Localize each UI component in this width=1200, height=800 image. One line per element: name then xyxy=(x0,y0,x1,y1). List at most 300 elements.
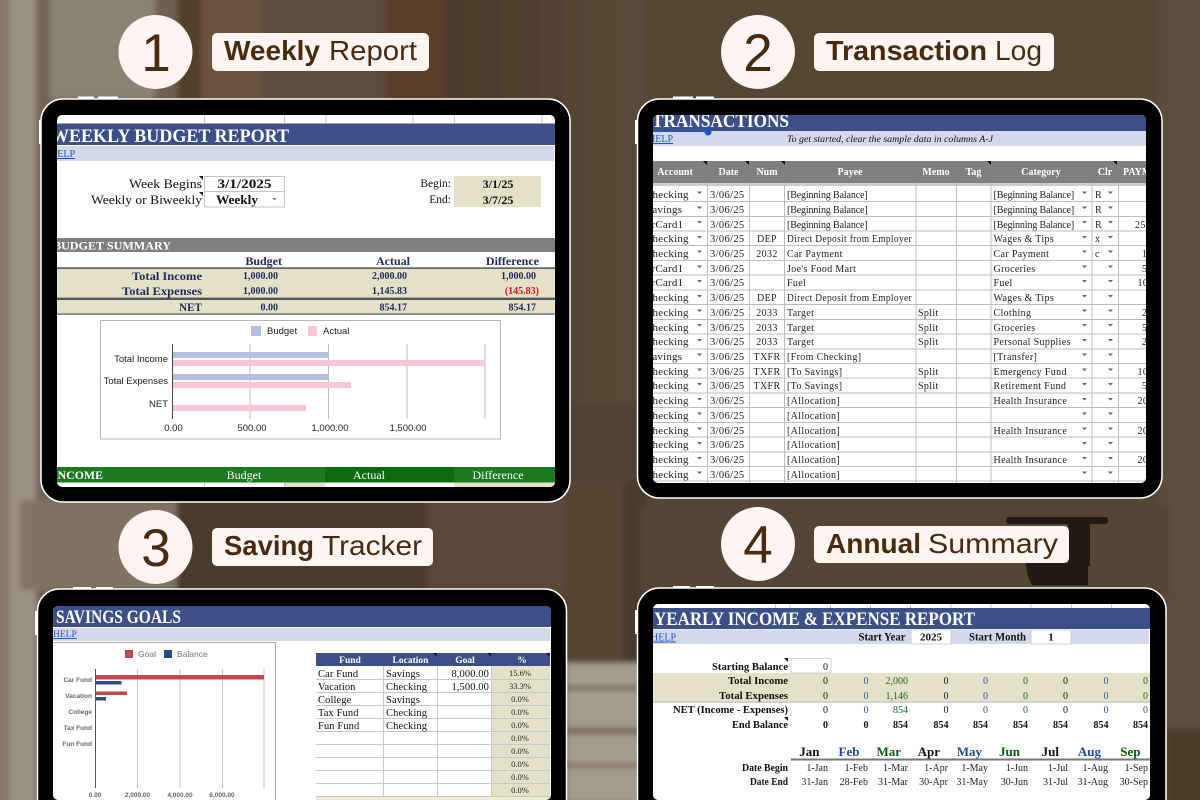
number column: 2033 xyxy=(756,337,778,348)
savings funds table: 0.0% xyxy=(511,785,529,795)
yearly summary table: 854 xyxy=(1053,720,1068,731)
memo column: Split xyxy=(918,381,939,392)
payment column xyxy=(1135,221,1146,463)
income section band: Actual xyxy=(353,468,386,482)
yearly summary table: 0 xyxy=(864,691,868,702)
yearly summary table: 0 xyxy=(1143,705,1148,716)
label: Weekly Report: Report xyxy=(329,35,417,66)
savings funds table: Fun Fund xyxy=(318,721,360,732)
yearly summary table: 0 xyxy=(1104,676,1108,687)
savings funds table: % xyxy=(517,656,527,666)
category column: Retirement Fund xyxy=(994,381,1066,392)
account column: CrCard1 xyxy=(644,263,683,275)
month headers and date ranges: Sep xyxy=(1120,744,1140,759)
month headers and date ranges: 1-Mar xyxy=(883,763,909,774)
payee column: [Allocation] xyxy=(787,440,840,451)
savings title bar xyxy=(53,606,551,628)
cleared column: R xyxy=(1095,220,1102,231)
savings funds table: 0.0% xyxy=(511,733,529,743)
chart axis labels xyxy=(62,677,235,799)
yearly summary table xyxy=(653,658,1150,731)
savings funds table: Checking xyxy=(386,708,428,719)
memo column: Split xyxy=(918,337,939,348)
savings funds table: 0.0% xyxy=(511,694,529,704)
payee column: [From Checking] xyxy=(787,352,861,363)
begin and end dates: End: xyxy=(429,194,451,206)
yearly summary table: 854 xyxy=(934,720,948,731)
cleared column: R xyxy=(1095,190,1102,201)
payee column: [Allocation] xyxy=(787,426,840,437)
number badge 4: 4 xyxy=(743,516,773,575)
heading 3: Saving Tracker xyxy=(118,510,433,584)
help band with instructions: HELP xyxy=(648,134,673,145)
month headers and date ranges: Mar xyxy=(876,744,901,759)
payment column: 100.00 xyxy=(1138,367,1167,378)
yearly summary table: 0 xyxy=(1063,691,1068,702)
budget summary table: NET xyxy=(179,300,202,314)
settings band xyxy=(651,630,1149,644)
settings band: Start Year xyxy=(858,632,906,644)
category column: Health Insurance xyxy=(994,455,1067,466)
heading 2: Transaction Log xyxy=(721,15,1054,89)
report title bar xyxy=(51,124,555,147)
date column: 3/06/25 xyxy=(710,426,745,437)
income section band xyxy=(53,467,555,488)
cell selection handle xyxy=(653,128,712,136)
savings title bar: SAVINGS GOALS xyxy=(56,608,181,628)
account column: Savings xyxy=(646,204,682,216)
budget vs actual bar chart xyxy=(100,320,500,439)
account column: Checking xyxy=(645,425,689,437)
date column: 3/06/25 xyxy=(710,323,745,334)
month headers and date ranges: Apr xyxy=(918,744,940,759)
savings funds table: Savings xyxy=(386,695,420,706)
budget summary table xyxy=(57,254,555,315)
account column: CrCard1 xyxy=(644,277,683,289)
date column: 3/06/25 xyxy=(710,440,745,451)
yearly summary table: 0 xyxy=(1063,705,1068,716)
date inputs: 3/1/2025 xyxy=(218,176,272,191)
yearly summary table: 0 xyxy=(823,662,828,673)
month headers and date ranges: 1-Jan xyxy=(806,763,828,774)
number badge 3: 3 xyxy=(141,519,171,578)
help band xyxy=(50,146,554,161)
yearly summary table: Total Income xyxy=(728,676,788,687)
account column: Checking xyxy=(645,380,689,392)
memo column: Split xyxy=(918,323,939,334)
savings funds table: Checking xyxy=(386,721,428,732)
column headers xyxy=(653,161,1172,186)
savings funds table: 8,000.00 xyxy=(451,669,489,680)
chart axis labels: Car Fund xyxy=(63,677,92,684)
yearly summary table: End Balance xyxy=(732,720,788,731)
category column: Groceries xyxy=(994,264,1036,275)
month headers and date ranges: Feb xyxy=(839,744,860,759)
chart axis labels: 1,500.00 xyxy=(390,423,426,434)
budget summary table: (145.83) xyxy=(505,286,539,297)
yearly summary table: 854 xyxy=(893,720,908,731)
budget summary table: Budget xyxy=(245,254,282,268)
payee column: Target xyxy=(787,323,814,334)
budget summary table: 1,000.00 xyxy=(243,286,278,297)
payee column: [Allocation] xyxy=(787,470,840,481)
transaction grid lines xyxy=(653,183,1146,483)
yearly summary table: 0 xyxy=(983,676,988,687)
budget summary table: Actual xyxy=(376,254,411,268)
label: Transaction Log: Log xyxy=(995,35,1042,66)
account column: Checking xyxy=(645,439,689,451)
number column: TXFR xyxy=(754,367,780,378)
month headers and date ranges: 1-Apr xyxy=(924,763,949,774)
payee column: [Allocation] xyxy=(787,396,840,407)
number badge 2 xyxy=(721,15,795,89)
help band: HELP xyxy=(53,630,77,640)
budget summary table: 0.00 xyxy=(260,302,278,314)
help band: HELP xyxy=(50,149,75,160)
heading 4: Annual Summary xyxy=(721,507,1069,581)
budget summary table: 2,000.00 xyxy=(372,271,407,282)
column headers: Num xyxy=(756,167,778,178)
help band xyxy=(53,628,550,641)
yearly summary table: 0 xyxy=(823,720,828,731)
savings funds table: 0.0% xyxy=(511,772,529,782)
column headers: Account xyxy=(657,167,693,178)
account column: Checking xyxy=(645,395,689,407)
category column xyxy=(994,190,1074,466)
date column: 3/06/25 xyxy=(710,337,745,348)
tablet 2: transaction log xyxy=(635,96,1172,498)
memo column: Split xyxy=(918,308,939,319)
savings funds table: 0.0% xyxy=(511,707,529,717)
month headers and date ranges: 1-Aug xyxy=(1082,763,1108,774)
budget summary band xyxy=(53,238,555,252)
savings funds table: Location xyxy=(393,656,429,666)
savings funds table: Fund xyxy=(339,656,362,666)
transaction rows xyxy=(644,189,1172,481)
payee column: [Beginning Balance] xyxy=(787,190,868,201)
chart axis labels: Fun Fund xyxy=(62,741,92,748)
budget summary table: 854.17 xyxy=(508,302,536,314)
category column: [Beginning Balance] xyxy=(994,205,1074,216)
payee column: Fuel xyxy=(787,278,806,289)
payee column: Joe's Food Mart xyxy=(787,264,856,275)
savings funds table: 0.0% xyxy=(511,720,529,730)
account column: Checking xyxy=(645,189,689,201)
payee column: [Beginning Balance] xyxy=(787,205,868,216)
month headers and date ranges: 28-Feb xyxy=(840,777,868,788)
payment column: 50.00 xyxy=(1142,381,1166,392)
date column: 3/06/25 xyxy=(710,367,745,378)
account column: Checking xyxy=(645,307,689,319)
label: Transaction Log xyxy=(814,33,1054,71)
settings band: 2025 xyxy=(920,632,942,644)
label: Weekly Report: Weekly xyxy=(224,35,320,66)
budget summary table: 1,000.00 xyxy=(243,271,278,282)
chart axis labels: Total Expenses xyxy=(104,376,168,387)
label: Saving Tracker: Tracker xyxy=(322,530,422,561)
chart axis labels: 1,000.00 xyxy=(312,423,348,434)
savings funds table: College xyxy=(318,695,352,706)
payee column: [Beginning Balance] xyxy=(787,220,868,231)
chart legend: Goal xyxy=(138,649,156,659)
date column: 3/06/25 xyxy=(710,205,745,216)
month headers and date ranges: Date Begin xyxy=(742,763,788,774)
month headers and date ranges: 1-Feb xyxy=(845,763,868,774)
chart legend xyxy=(125,650,208,658)
savings funds table: 33.3% xyxy=(509,681,531,691)
number badge 2: 2 xyxy=(743,24,773,83)
month headers and date ranges: 30-Jun xyxy=(1001,777,1028,788)
chart axis labels: 4,000.00 xyxy=(167,792,193,799)
savings funds table: Car Fund xyxy=(318,669,359,680)
number badge 4 xyxy=(721,507,795,581)
payment column: 25.00 xyxy=(1142,337,1166,348)
begin and end dates xyxy=(420,176,541,207)
date column: 3/06/25 xyxy=(710,308,745,319)
date column: 3/06/25 xyxy=(710,455,745,466)
savings funds table: 0.0% xyxy=(511,746,529,756)
payee column: [Allocation] xyxy=(787,455,840,466)
category column: Health Insurance xyxy=(994,426,1067,437)
month headers and date ranges: 31-Aug xyxy=(1077,777,1108,788)
month headers and date ranges: 1-Jun xyxy=(1006,763,1028,774)
column headers: PAYMENT xyxy=(1123,167,1172,178)
account column: Checking xyxy=(645,336,689,348)
yearly report title bar xyxy=(653,608,1150,630)
chart axis labels xyxy=(104,354,426,434)
chart legend xyxy=(251,326,349,337)
account column: Checking xyxy=(645,248,689,260)
payment column: 175.00 xyxy=(1142,249,1172,260)
month headers and date ranges: May xyxy=(957,744,982,759)
month headers and date ranges: 31-Jul xyxy=(1043,777,1068,788)
month headers and date ranges: Date End xyxy=(750,777,788,788)
label: Saving Tracker xyxy=(212,528,433,566)
yearly summary table: 0 xyxy=(1104,705,1108,716)
payee column: [Allocation] xyxy=(787,411,840,422)
budget summary band: BUDGET SUMMARY xyxy=(53,240,172,252)
income section band: INCOME xyxy=(53,468,103,482)
payee column: Target xyxy=(787,308,814,319)
savings funds table: Tax Fund xyxy=(318,708,359,719)
date column: 3/06/25 xyxy=(710,411,745,422)
column headers: Memo xyxy=(922,167,950,178)
chart axis labels: Tax Fund xyxy=(64,725,92,732)
number badge 1 xyxy=(118,15,192,89)
month headers and date ranges xyxy=(742,744,1150,788)
month headers and date ranges: 1-Jul xyxy=(1048,763,1068,774)
yearly summary table: Starting Balance xyxy=(712,662,788,673)
category column: Health Insurance xyxy=(994,396,1067,407)
chart axis labels: 500.00 xyxy=(237,423,267,434)
savings funds table: Goal xyxy=(455,656,475,666)
savings funds table: 15.6% xyxy=(509,668,531,678)
tablet 4: yearly income and expense report xyxy=(635,586,1166,800)
category column: [Beginning Balance] xyxy=(994,190,1074,201)
chart legend: Balance xyxy=(177,649,208,659)
payee column xyxy=(787,190,912,481)
month headers and date ranges: 30-Apr xyxy=(919,777,949,788)
tablet 1: weekly budget report xyxy=(39,96,570,502)
category column: Personal Supplies xyxy=(994,337,1071,348)
yearly summary table: NET (Income - Expenses) xyxy=(673,705,789,716)
date column: 3/06/25 xyxy=(710,190,745,201)
tablet 3: savings goals xyxy=(35,587,566,800)
label: Transaction Log: Transaction xyxy=(826,35,987,66)
account column xyxy=(653,191,688,480)
chart axis labels: Vacation xyxy=(65,693,92,700)
category column: Groceries xyxy=(994,323,1036,334)
date column: 3/06/25 xyxy=(710,220,745,231)
category column: [Beginning Balance] xyxy=(994,220,1074,231)
month headers and date ranges: 31-Jan xyxy=(801,777,828,788)
date column: 3/06/25 xyxy=(710,249,745,260)
savings funds table xyxy=(316,653,550,800)
budget summary table: 1,000.00 xyxy=(501,271,536,282)
category column: Emergency Fund xyxy=(994,367,1067,378)
goal vs balance bar chart xyxy=(53,642,276,800)
yearly summary table: Total Expenses xyxy=(719,691,788,702)
dropdown carets xyxy=(697,192,1113,474)
yearly summary table: 0 xyxy=(864,676,868,687)
savings funds table: Savings xyxy=(386,669,420,680)
payee column: Direct Deposit from Employer xyxy=(787,234,912,245)
payee column: Car Payment xyxy=(787,249,843,260)
yearly summary table: 0 xyxy=(1104,691,1108,702)
date column: 3/06/25 xyxy=(710,381,745,392)
account column: Savings xyxy=(646,351,682,363)
date column: 3/06/25 xyxy=(710,470,745,481)
payee column: Target xyxy=(787,337,814,348)
account column: Checking xyxy=(645,410,689,422)
heading 1: Weekly Report xyxy=(118,15,429,89)
help band with instructions: To get started, clear the sample data in columns A-J xyxy=(787,135,994,145)
date inputs xyxy=(91,176,284,207)
month headers and date ranges: 31-Mar xyxy=(878,777,909,788)
month headers and date ranges: Jun xyxy=(999,744,1021,759)
chart bars xyxy=(173,352,485,411)
payment column: 50.00 xyxy=(1142,264,1166,275)
payment column: 200.00 xyxy=(1138,426,1167,437)
begin and end dates: Begin: xyxy=(420,178,451,190)
month headers and date ranges: 1-May xyxy=(961,763,988,774)
date column: 3/06/25 xyxy=(710,234,745,245)
category column: Clothing xyxy=(994,308,1031,319)
date inputs: Weekly or Biweekly xyxy=(91,192,203,207)
month headers and date ranges: 1-Sep xyxy=(1125,763,1148,774)
yearly summary table: 0 xyxy=(944,676,948,687)
yearly summary table: 0 xyxy=(1063,676,1068,687)
budget summary table: Difference xyxy=(486,254,540,268)
category column: Wages & Tips xyxy=(994,234,1054,245)
yearly summary table: 0 xyxy=(1143,691,1148,702)
report title bar: WEEKLY BUDGET REPORT xyxy=(51,126,289,147)
date column xyxy=(710,190,745,481)
yearly summary table: 0 xyxy=(1023,691,1028,702)
date column: 3/06/25 xyxy=(710,293,745,304)
chart axis labels: 0.00 xyxy=(89,792,102,799)
transactions title bar: TRANSACTIONS xyxy=(652,112,789,132)
yearly summary table: 0 xyxy=(1143,676,1148,687)
chart axis labels: 6,000.00 xyxy=(209,792,235,799)
category column: [Transfer] xyxy=(994,352,1037,363)
account column: Checking xyxy=(645,322,689,334)
chart axis labels: Total Income xyxy=(114,354,168,365)
yearly summary table: 854 xyxy=(1013,720,1028,731)
payment column: 50.00 xyxy=(1142,323,1166,334)
transactions title bar xyxy=(653,115,1146,131)
yearly summary table: 0 xyxy=(944,705,948,716)
yearly summary table: 0 xyxy=(864,720,868,731)
date column: 3/06/25 xyxy=(710,396,745,407)
number column: 2032 xyxy=(756,249,778,260)
yearly summary table: 1,146 xyxy=(886,691,908,702)
number column: TXFR xyxy=(754,352,780,363)
label: Annual Summary: Annual xyxy=(826,528,921,559)
account column: Checking xyxy=(645,454,689,466)
label: Annual Summary xyxy=(814,526,1069,563)
settings band: 1 xyxy=(1048,632,1054,644)
chart axis labels: 0.00 xyxy=(164,423,183,434)
dark pedestal behind heading 4 xyxy=(1006,517,1108,585)
chart bars xyxy=(96,675,264,700)
cleared column: x xyxy=(1095,234,1100,245)
account column: Checking xyxy=(645,366,689,378)
date inputs: Week Begins xyxy=(129,176,202,191)
begin and end dates: 3/7/25 xyxy=(483,193,513,207)
payment column: 100.00 xyxy=(1138,278,1167,289)
settings band: Start Month xyxy=(969,632,1027,644)
yearly summary table: 854 xyxy=(1094,720,1108,731)
savings funds table: 0.0% xyxy=(511,759,529,769)
memo column: Split xyxy=(918,367,939,378)
chart axis labels: College xyxy=(69,709,92,716)
income section band: Budget xyxy=(227,468,262,482)
payee column: [To Savings] xyxy=(787,367,842,378)
account column: CrCard1 xyxy=(644,219,683,231)
budget summary table: Total Income xyxy=(132,269,203,283)
yearly summary table: 854 xyxy=(1133,720,1148,731)
account column: Checking xyxy=(645,469,689,481)
savings funds table: 1,500.00 xyxy=(451,682,489,693)
budget summary table: 1,145.83 xyxy=(372,286,407,297)
help band with instructions xyxy=(648,131,1146,146)
yearly report title bar: YEARLY INCOME & EXPENSE REPORT xyxy=(654,610,976,630)
column headers: Clr xyxy=(1098,167,1113,178)
number column: DEP xyxy=(757,234,777,245)
memo column xyxy=(918,308,939,392)
settings band: HELP xyxy=(651,632,676,644)
yearly summary table: 0 xyxy=(823,691,828,702)
label: Annual Summary: Summary xyxy=(928,528,1058,559)
begin and end dates: 3/1/25 xyxy=(483,177,513,191)
account column: Checking xyxy=(645,233,689,245)
payment column: 200.00 xyxy=(1138,455,1167,466)
month headers and date ranges: 31-May xyxy=(956,777,988,788)
yearly summary table: 0 xyxy=(983,705,988,716)
cleared column: c xyxy=(1095,249,1100,260)
payment column: 200.00 xyxy=(1138,396,1167,407)
yearly summary table: 0 xyxy=(823,676,828,687)
number badge 1: 1 xyxy=(141,24,171,83)
chart axis labels: 2,000.00 xyxy=(125,792,151,799)
date column: 3/06/25 xyxy=(710,264,745,275)
yearly summary table: 0 xyxy=(983,691,988,702)
cleared column: R xyxy=(1095,205,1102,216)
number column: 2033 xyxy=(756,308,778,319)
column headers: Tag xyxy=(966,167,981,178)
date column: 3/06/25 xyxy=(710,278,745,289)
